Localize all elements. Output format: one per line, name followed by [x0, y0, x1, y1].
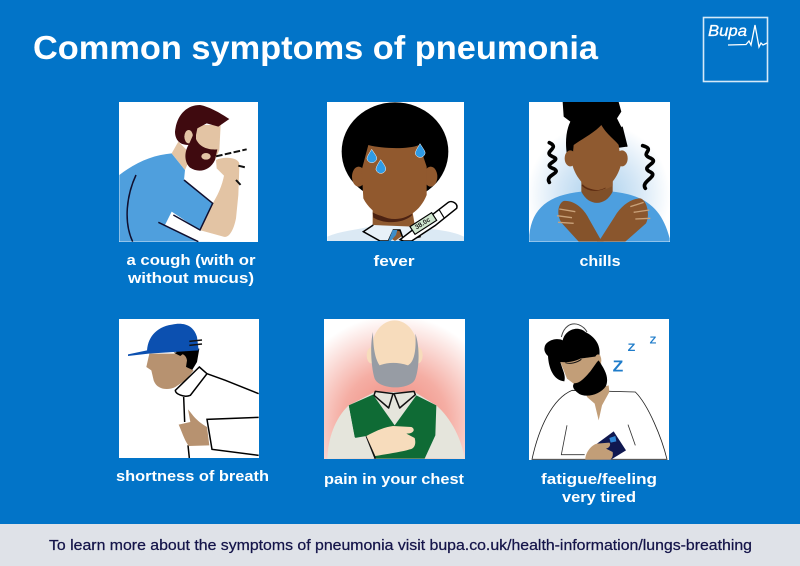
- logo: Bupa: [704, 18, 768, 82]
- neck: [581, 178, 613, 205]
- cough lines: [216, 149, 247, 185]
- hair front: [174, 351, 186, 356]
- face: [362, 145, 427, 219]
- shirt folds: [561, 425, 635, 455]
- label: cough: a cough (with or: [126, 252, 256, 269]
- cap: [128, 324, 199, 356]
- eye: [565, 359, 581, 363]
- arm: [199, 167, 239, 237]
- panel: cough: [119, 102, 258, 242]
- hand: [366, 426, 415, 456]
- panel: fatigue: [529, 319, 669, 460]
- hand: [585, 443, 613, 459]
- sleeve: [327, 405, 375, 459]
- left arm: [558, 201, 604, 242]
- shirt: [327, 392, 465, 459]
- sleep letters: Z: [613, 358, 623, 375]
- neck shade: [581, 181, 613, 190]
- beard: [573, 360, 607, 396]
- sweat drops: [367, 144, 425, 173]
- neck: [585, 385, 609, 420]
- panel: chest pain: [324, 319, 465, 459]
- neck: [373, 207, 415, 241]
- sleep letters: Z: [628, 342, 635, 354]
- ears: [565, 150, 576, 166]
- vest: [349, 395, 436, 459]
- panel: chills: [529, 102, 670, 242]
- sleeve: [207, 417, 259, 455]
- hair strand: [622, 127, 627, 147]
- beard: [185, 128, 217, 171]
- label: fatigue: [541, 471, 657, 506]
- face: [193, 125, 221, 160]
- clothing lines: [127, 175, 213, 242]
- hair: [175, 105, 229, 145]
- hand: [179, 409, 209, 446]
- ears: [352, 167, 365, 187]
- phone: [597, 431, 626, 459]
- panel: shortness of breath: [119, 319, 259, 458]
- ear: [595, 354, 601, 366]
- collar: [175, 367, 207, 396]
- tie: [388, 230, 397, 241]
- label: cough: [126, 252, 256, 287]
- shirt opening: [165, 212, 223, 242]
- hair: [172, 349, 199, 370]
- face: [572, 125, 621, 190]
- label: fever: fever: [374, 253, 415, 270]
- shirt: [327, 227, 464, 241]
- label: fatigue: fatigue/feeling: [541, 471, 657, 488]
- hair: [563, 102, 627, 155]
- face: [560, 355, 602, 389]
- hair: [342, 102, 448, 201]
- collar: [363, 225, 420, 241]
- logo: Bupa: Bupa: [708, 23, 747, 40]
- ear: [184, 130, 193, 143]
- neck shadow: [373, 212, 412, 222]
- panel: fever: [327, 102, 464, 241]
- cap seams: [189, 340, 202, 345]
- right arm: [597, 198, 648, 242]
- footer: To learn more about the symptoms of pneumonia visit bupa.co.uk/health-information/lungs-breathing: [49, 538, 752, 554]
- mouth: [201, 153, 211, 160]
- ears: [367, 347, 376, 363]
- face and neck: [146, 353, 194, 389]
- sleep letters: Z: [650, 335, 656, 346]
- neck: [172, 142, 192, 170]
- thermometer: 38.0c: [414, 216, 432, 231]
- title: Common symptoms of pneumonia: [33, 29, 599, 66]
- label: shortness of breath: shortness of breath: [116, 468, 269, 485]
- neck line: [582, 185, 605, 190]
- label: fatigue: very tired: [562, 489, 636, 506]
- hat line: [561, 324, 587, 337]
- shirt: [529, 192, 670, 242]
- shiver lines: [548, 143, 556, 182]
- fingers: [557, 202, 650, 223]
- collar: [374, 391, 415, 408]
- fist: [216, 158, 239, 178]
- jacket line: [184, 374, 259, 458]
- sleep letters: [613, 335, 656, 375]
- label: chest pain: pain in your chest: [324, 471, 464, 488]
- sleeve cuff: [366, 436, 375, 459]
- head: [372, 320, 417, 377]
- label: chills: chills: [580, 253, 620, 270]
- shirt: [119, 153, 213, 242]
- label: cough: without mucus): [127, 270, 254, 287]
- footer: [0, 524, 800, 566]
- beard: [371, 332, 419, 387]
- hair: [544, 329, 600, 381]
- shirt: [532, 390, 667, 459]
